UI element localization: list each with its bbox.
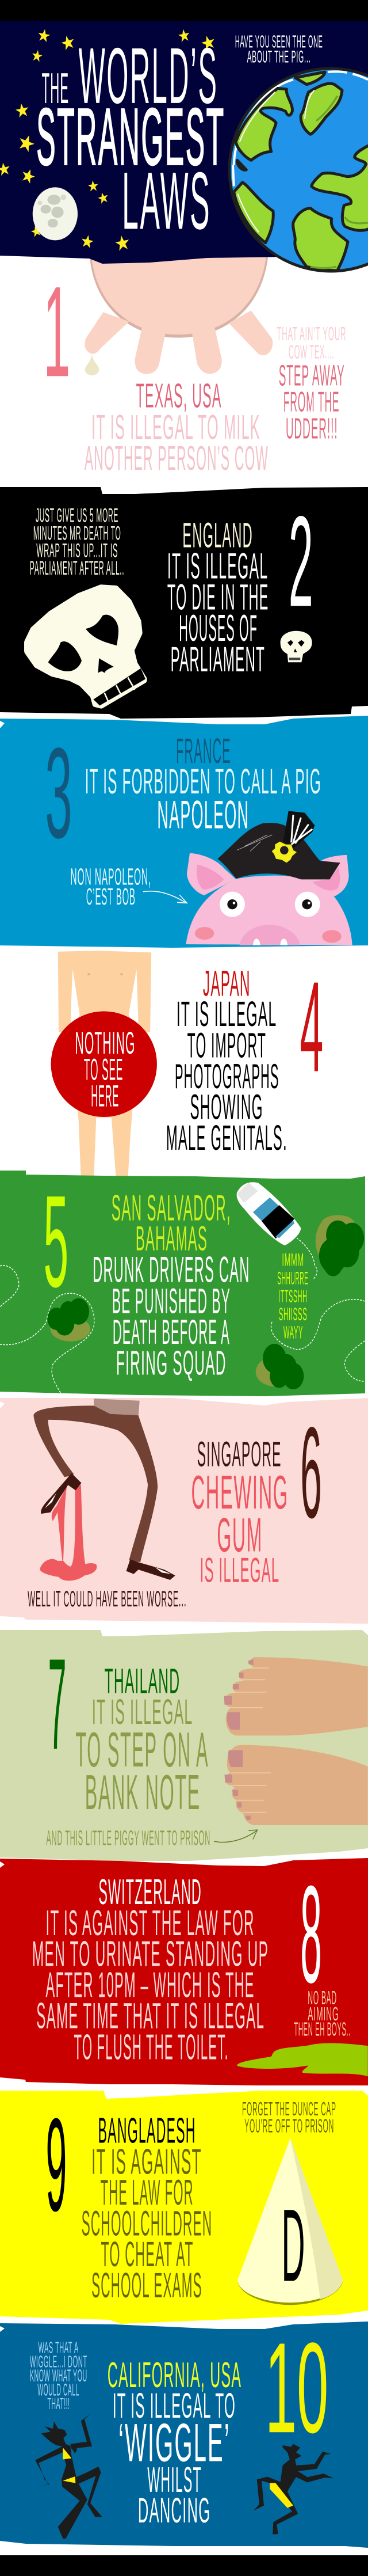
icon: moon — [33, 187, 78, 240]
caption: pig teaser — [235, 31, 323, 66]
red censor circle: NOTHING — [75, 1025, 135, 1061]
icon: dunce cap: D — [282, 2187, 305, 2303]
panel background — [0, 1171, 365, 1396]
law text — [93, 1188, 250, 1382]
header background — [0, 21, 368, 264]
panel background — [0, 487, 368, 719]
icon: stars — [0, 28, 216, 251]
panel: law 5 San Salvador — [0, 1168, 365, 1396]
caption: bob — [70, 864, 151, 910]
text: 4 — [300, 955, 323, 1099]
panel: law 6 Singapore — [0, 1398, 368, 1624]
caption: no bad aiming — [294, 1988, 351, 2041]
text: law 1: TEXAS, USA — [136, 377, 222, 415]
law text — [85, 731, 321, 837]
law text: ENGLAND — [182, 515, 253, 555]
law text — [91, 2111, 202, 2212]
icon: legs stuck in gum — [33, 1399, 175, 1580]
icon: trees — [47, 1215, 364, 1389]
law text: TO IMPORT — [187, 1025, 266, 1065]
law text: DEATH BEFORE A — [113, 1312, 230, 1351]
law text: IT IS ILLEGAL — [167, 546, 268, 586]
icon: earth — [229, 69, 368, 271]
text: law 1 — [43, 260, 346, 477]
panel: law 9 Bangladesh: THE LAW FOR — [101, 2173, 194, 2212]
panel: law 9 Bangladesh: BANGLADESH — [98, 2111, 196, 2151]
panel: law 8 Switzerland — [0, 1857, 368, 2085]
icon: skull small — [281, 631, 312, 662]
panel: law 2 England: PARLIAMENT AFTER ALL.. — [30, 556, 124, 579]
panel: law 9 Bangladesh — [0, 2091, 368, 2324]
panel: law 3 France: NON NAPOLEON, — [70, 864, 151, 890]
icon: dunce cap — [237, 2138, 343, 2305]
law text — [32, 1872, 269, 2066]
panel: law 1 Texas — [43, 250, 346, 477]
law text: NAPOLEON — [157, 793, 249, 837]
icon: left dancer — [35, 2413, 102, 2539]
panel: law 9 Bangladesh: TO CHEAT AT — [101, 2235, 194, 2274]
title — [36, 32, 225, 246]
law text — [166, 964, 288, 1157]
green puddle — [237, 2043, 368, 2076]
caption: wiggle — [30, 2339, 87, 2412]
panel background — [0, 716, 368, 948]
panel background — [0, 1858, 368, 2085]
panel: law 2 England — [0, 487, 368, 719]
panel: law 7 Thailand: 7 — [48, 1632, 66, 1777]
law text: BAHAMAS — [136, 1218, 208, 1258]
law text: DANCING — [138, 2491, 210, 2530]
panel background — [0, 1398, 368, 1624]
law text — [108, 2355, 241, 2530]
panel: law 2 England: JUST GIVE US 5 MORE — [36, 504, 118, 527]
caption: wiggle: THAT!!! — [47, 2395, 70, 2412]
icon: car — [237, 1182, 301, 1245]
bottom black strip — [0, 2555, 368, 2576]
title: LAWS — [122, 155, 211, 246]
panel background — [0, 2322, 368, 2548]
panel: law 9 Bangladesh: IT IS AGAINST — [91, 2142, 202, 2181]
red censor circle: TO SEE — [84, 1053, 123, 1087]
caption: drunk speech: IMMM — [282, 1250, 304, 1270]
top black strip — [0, 0, 368, 21]
caption: pig teaser: ABOUT THE PIG... — [247, 47, 311, 66]
panel: law 7 Thailand — [0, 1630, 368, 1861]
law text: WHILST — [147, 2460, 202, 2500]
law text: BANK NOTE — [85, 1765, 201, 1820]
panel: law 3 France: 3 — [45, 721, 72, 865]
law text continued — [82, 2203, 212, 2305]
dashed tracks — [0, 1238, 365, 1394]
panel: law 10 California: WOULD CALL — [37, 2381, 79, 2400]
law text: FIRING SQUAD — [116, 1344, 227, 1382]
law text: IS ILLEGAL — [200, 1550, 279, 1590]
law text: JAPAN — [203, 964, 251, 1004]
panel: header — [0, 21, 368, 271]
panel: law 5 San Salvador: ITTSSHH — [278, 1286, 307, 1306]
law text: GUM — [217, 1508, 263, 1562]
title: THE — [42, 64, 69, 113]
red censor circle — [51, 1011, 157, 1117]
caption: bob: C’EST BOB — [86, 883, 136, 910]
law text — [167, 515, 269, 679]
panel background — [0, 2091, 368, 2324]
arrow — [143, 891, 187, 903]
law text: BE PUNISHED BY — [112, 1281, 231, 1321]
law text: IT IS ILLEGAL — [92, 1692, 193, 1731]
arrow — [214, 1830, 258, 1842]
red censor circle: HERE — [91, 1080, 119, 1114]
panel: law 10 California: KNOW WHAT YOU — [30, 2366, 87, 2385]
law text — [75, 1661, 209, 1820]
panel: law 7 Thailand: TO STEP ON A — [75, 1723, 209, 1777]
icon: feet — [224, 1657, 368, 1825]
icon: right dancer — [254, 2444, 334, 2535]
law text: SAN SALVADOR, — [112, 1188, 231, 1229]
icon: naked torso — [58, 951, 151, 1179]
panel: law 10 California: WAS THAT A — [39, 2339, 79, 2357]
panel: law 6 Singapore: 6 — [300, 1401, 322, 1545]
law text: PARLIAMENT — [171, 639, 265, 679]
panel: law 3 France — [0, 716, 368, 948]
caption: parliament — [30, 504, 124, 579]
caption: drunk speech: WAYY — [283, 1322, 303, 1342]
title: WORLD’S — [79, 32, 218, 120]
panel: law 10 California: WIGGLE...I DONT — [30, 2353, 87, 2371]
panel background — [0, 1630, 368, 1861]
panel: law 9 Bangladesh: 9 — [46, 2091, 67, 2239]
panel: law 5 San Salvador: SHHURRE — [277, 1268, 309, 1288]
panel: law 2 England: HOUSES OF — [179, 607, 258, 649]
law text: THAILAND — [105, 1661, 180, 1701]
icon: pig with Napoleon hat — [186, 811, 352, 945]
caption: dunce cap — [242, 2098, 336, 2137]
icon: skull large — [27, 588, 145, 705]
law text: SWITZERLAND — [98, 1872, 202, 1912]
panel: law 2 England: 2 — [289, 490, 313, 633]
caption: drunk speech — [277, 1250, 309, 1342]
panel: law 5 San Salvador: SHIISSS — [279, 1304, 307, 1324]
icon: cow udder — [85, 250, 273, 375]
panel: law 10 California — [0, 2316, 368, 2548]
panel: law 2 England: MINUTES MR DEATH TO — [33, 522, 121, 544]
caption: parliament: WRAP THIS UP...IT IS — [36, 539, 118, 561]
law text: FRANCE — [176, 731, 231, 770]
panel: law 4 Japan — [51, 951, 323, 1179]
panel: law 5 San Salvador: 5 — [43, 1168, 68, 1314]
law text: SHOWING — [190, 1087, 263, 1127]
text: law 1: 1 — [43, 260, 70, 404]
law text — [191, 1434, 289, 1590]
